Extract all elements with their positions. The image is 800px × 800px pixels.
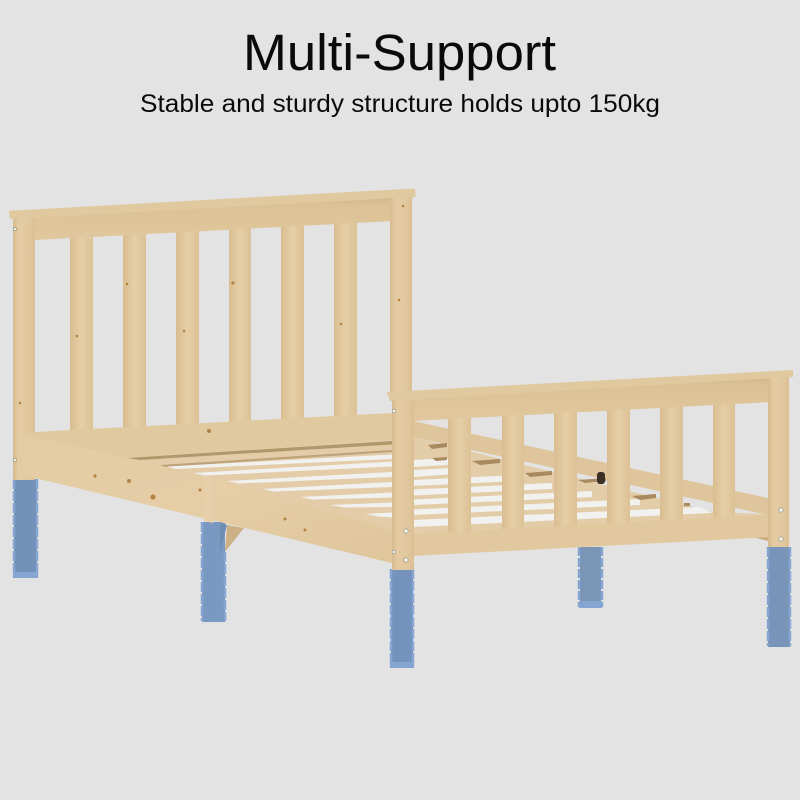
headboard cap: [9, 188, 416, 219]
far-side legs and brace: [13, 479, 790, 647]
bolt: [597, 472, 605, 484]
far side rail: [413, 421, 772, 516]
white slat gaps: [167, 454, 392, 518]
footboard top rail: [413, 376, 772, 421]
centre support post: [204, 476, 213, 523]
footboard: [13, 227, 793, 570]
brace: [225, 525, 244, 552]
slat base: [127, 440, 392, 532]
subtitle: Stable and sturdy structure holds upto 150kg: [140, 90, 660, 118]
leg: near footboard left: [390, 569, 414, 668]
footboard left post: [392, 398, 414, 570]
slat ends: [428, 443, 690, 506]
slats seen through footboard: [413, 421, 772, 536]
headboard upper rail: [35, 196, 394, 240]
headboard right post: [390, 196, 412, 395]
headboard slats: [70, 222, 357, 433]
slat field: [413, 437, 768, 536]
near side rail: [22, 429, 392, 563]
leg: headboard left: [13, 479, 38, 578]
screws: [13, 227, 783, 562]
leg: headboard right: [202, 522, 227, 622]
headboard lower rail: [22, 413, 392, 458]
under-rail brace: [752, 537, 768, 541]
leg: far right: [768, 547, 790, 647]
leg: far footboard centre: [579, 547, 602, 608]
dark slat gap: [127, 441, 392, 460]
footboard bottom rail: [413, 514, 772, 556]
white slat gaps right: [413, 458, 712, 527]
headboard: [9, 188, 416, 480]
title: Multi-Support: [243, 24, 556, 81]
footboard right post: [768, 376, 789, 547]
footboard cap: [387, 370, 793, 401]
headboard left post: [13, 217, 35, 480]
knots: [93, 429, 307, 532]
headboard knots: [19, 205, 404, 404]
footboard slats: [448, 403, 735, 533]
mattress platform: [22, 413, 392, 532]
